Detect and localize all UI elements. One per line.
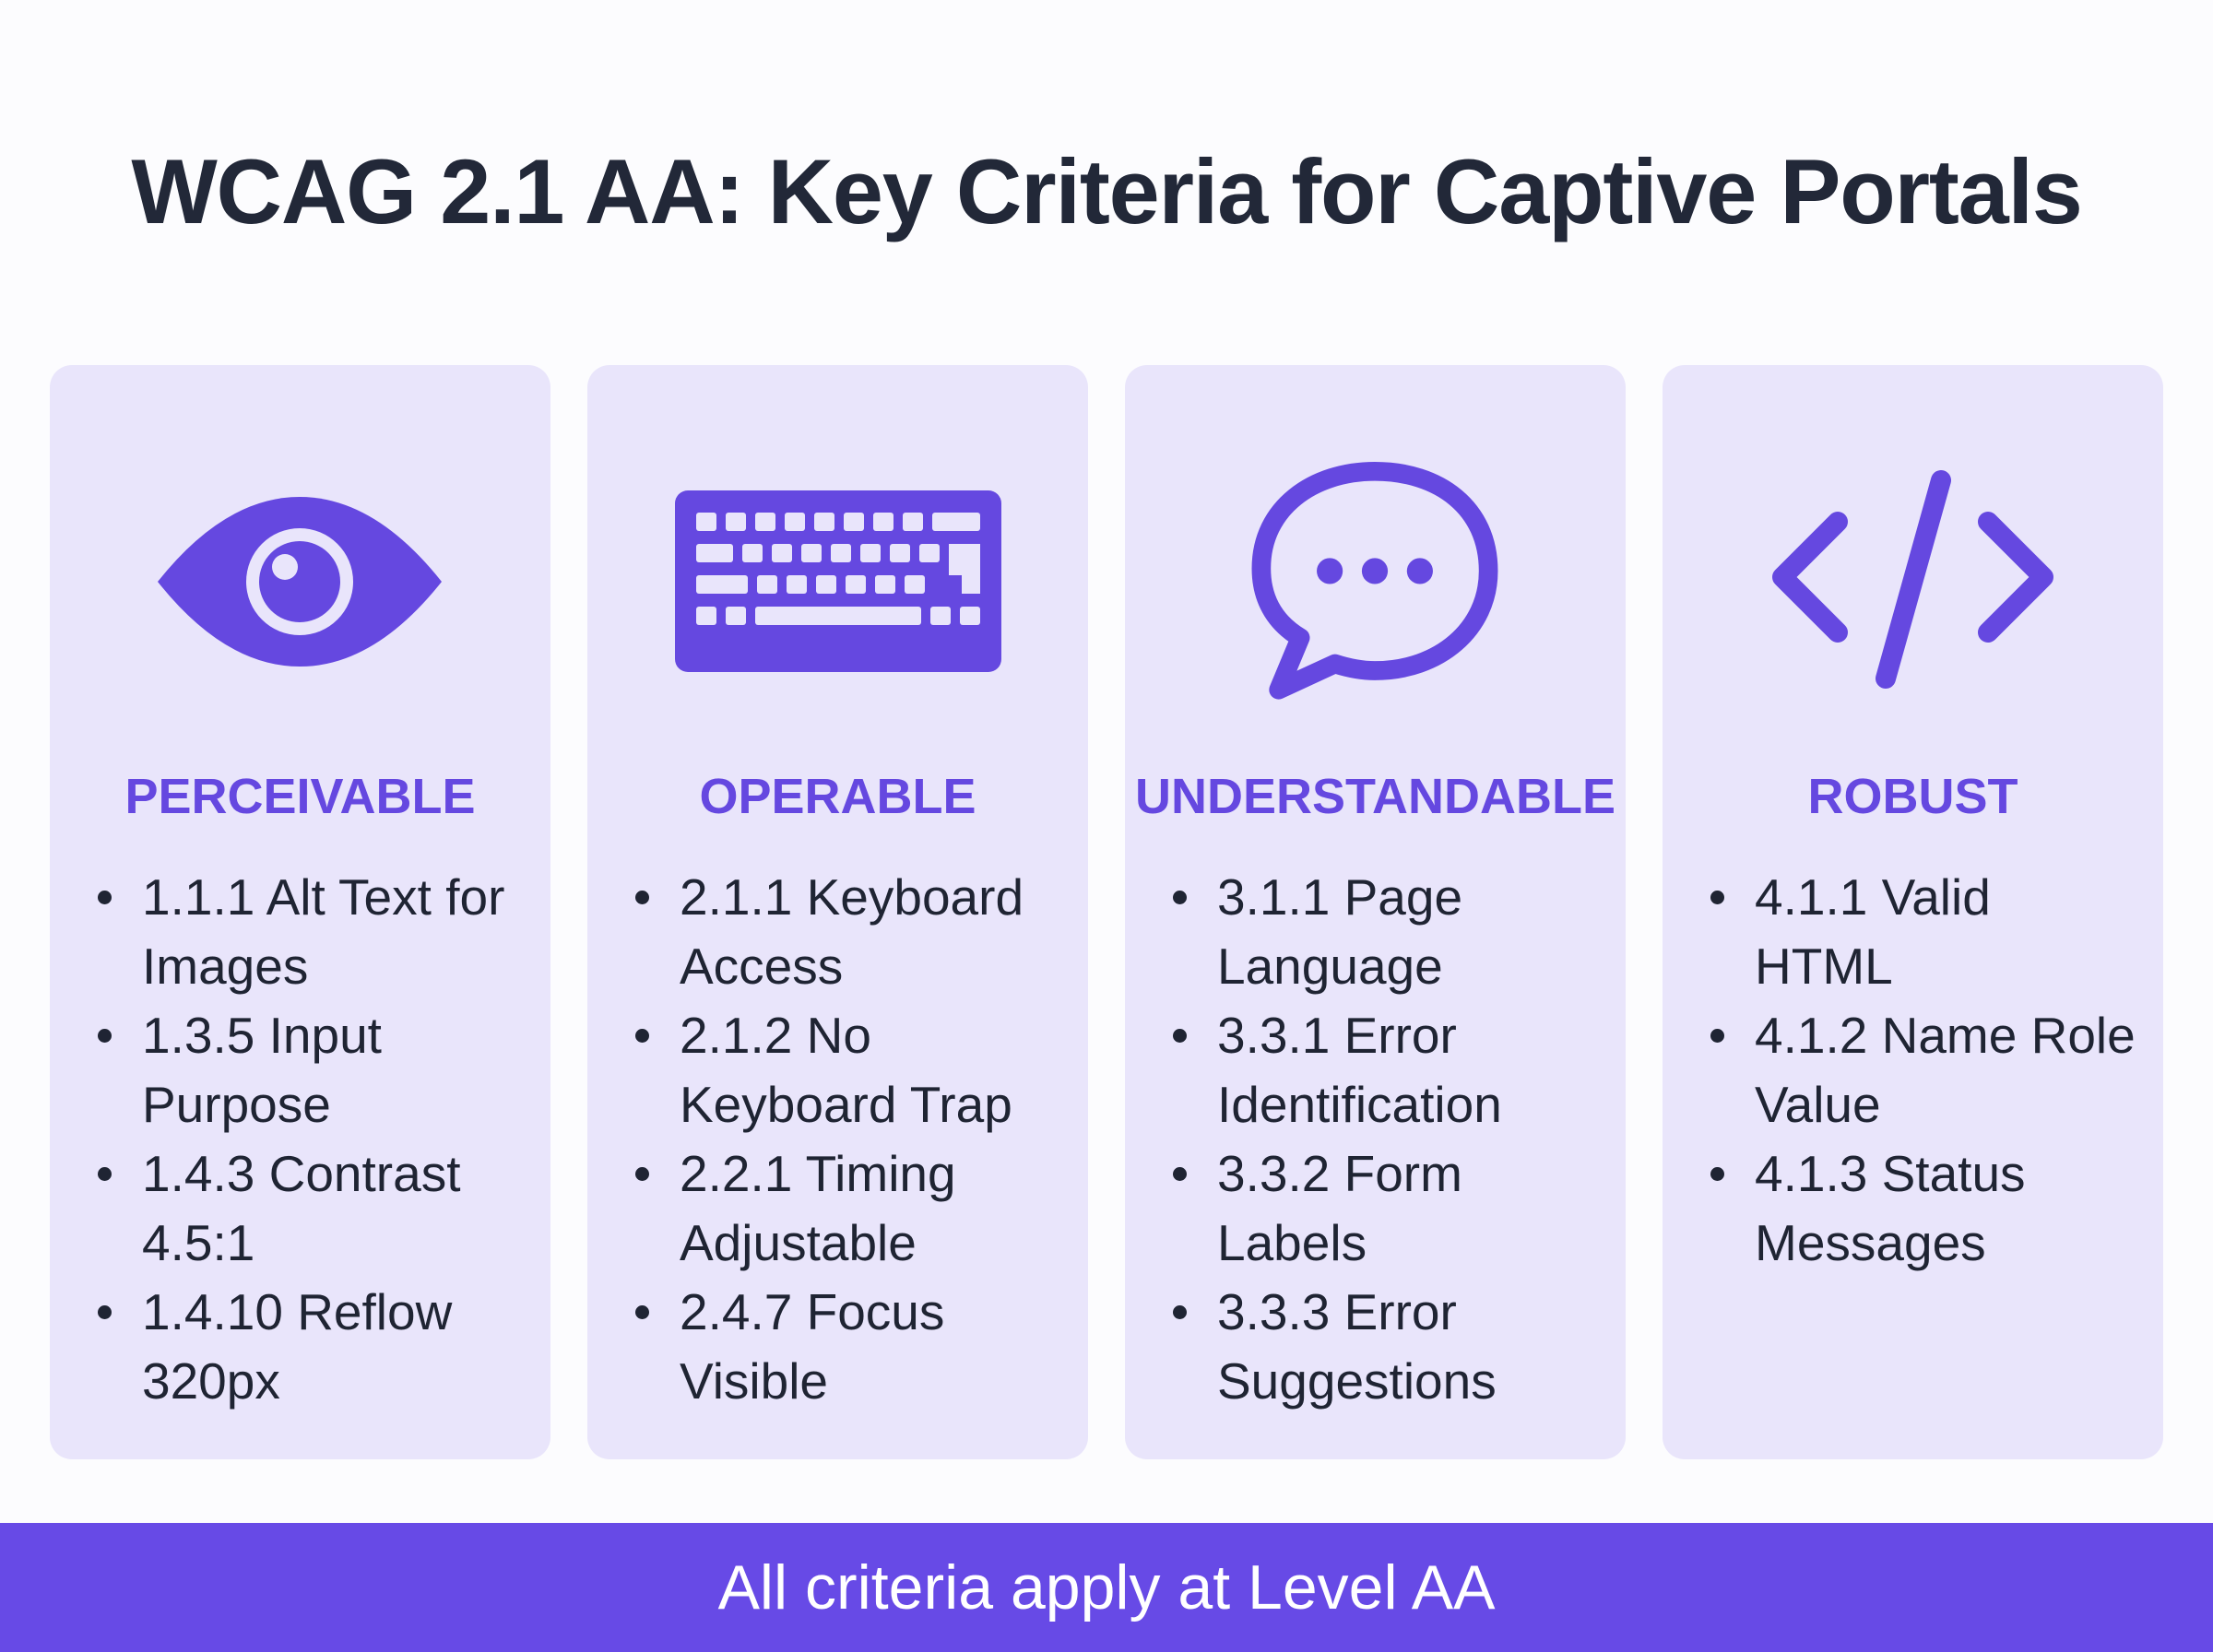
criteria list: Keyboard Trap <box>680 1076 1012 1133</box>
criteria list: Access <box>680 938 843 995</box>
criteria list: 4.5:1 <box>142 1214 254 1271</box>
footer banner: All criteria apply at Level AA <box>718 1552 1495 1622</box>
criteria list: 1.4.10 Reflow <box>142 1283 452 1340</box>
heading: PERCEIVABLE <box>124 769 476 824</box>
footer banner <box>0 1523 2213 1652</box>
heading: UNDERSTANDABLE <box>1135 769 1615 824</box>
criteria list: 4.1.3 Status <box>1755 1145 2026 1202</box>
criteria list <box>98 868 504 1410</box>
criteria list <box>1173 868 1502 1410</box>
title: WCAG 2.1 AA: Key Criteria for Captive Portals <box>131 140 2082 242</box>
criteria list: 4.1.2 Name Role <box>1755 1007 2136 1064</box>
criteria list: 2.2.1 Timing <box>680 1145 956 1202</box>
panel: perceivable <box>50 365 550 1459</box>
heading: ROBUST <box>1807 769 2018 824</box>
criteria list: 320px <box>142 1352 280 1410</box>
criteria list: Adjustable <box>680 1214 917 1271</box>
criteria list: HTML <box>1755 938 1893 995</box>
icon: speech bubble <box>1252 462 1497 700</box>
criteria list: Identification <box>1217 1076 1502 1133</box>
panel: operable <box>587 365 1088 1459</box>
panel: robust <box>1663 365 2163 1459</box>
icon: keyboard <box>675 490 1001 672</box>
criteria list: Visible <box>680 1352 828 1410</box>
criteria list: 3.1.1 Page <box>1217 868 1462 926</box>
criteria list: 1.4.3 Contrast <box>142 1145 460 1202</box>
criteria list: Suggestions <box>1217 1352 1497 1410</box>
icon: code brackets <box>1772 470 2053 689</box>
panel: understandable <box>1125 365 1626 1459</box>
criteria list: Labels <box>1217 1214 1367 1271</box>
criteria list: 3.3.1 Error <box>1217 1007 1457 1064</box>
criteria list: 2.1.1 Keyboard <box>680 868 1024 926</box>
criteria list: 2.4.7 Focus <box>680 1283 944 1340</box>
criteria list: 4.1.1 Valid <box>1755 868 1991 926</box>
criteria list: 3.3.3 Error <box>1217 1283 1457 1340</box>
criteria list: Images <box>142 938 308 995</box>
icon: eye <box>158 497 442 667</box>
criteria list: 1.1.1 Alt Text for <box>142 868 504 926</box>
criteria list: Messages <box>1755 1214 1986 1271</box>
criteria list <box>1710 868 2136 1271</box>
criteria list: 2.1.2 No <box>680 1007 871 1064</box>
criteria list: 1.3.5 Input <box>142 1007 382 1064</box>
criteria list: Language <box>1217 938 1443 995</box>
criteria list: Purpose <box>142 1076 331 1133</box>
criteria list <box>635 868 1024 1410</box>
criteria list: 3.3.2 Form <box>1217 1145 1462 1202</box>
heading: OPERABLE <box>699 769 976 824</box>
criteria list: Value <box>1755 1076 1881 1133</box>
